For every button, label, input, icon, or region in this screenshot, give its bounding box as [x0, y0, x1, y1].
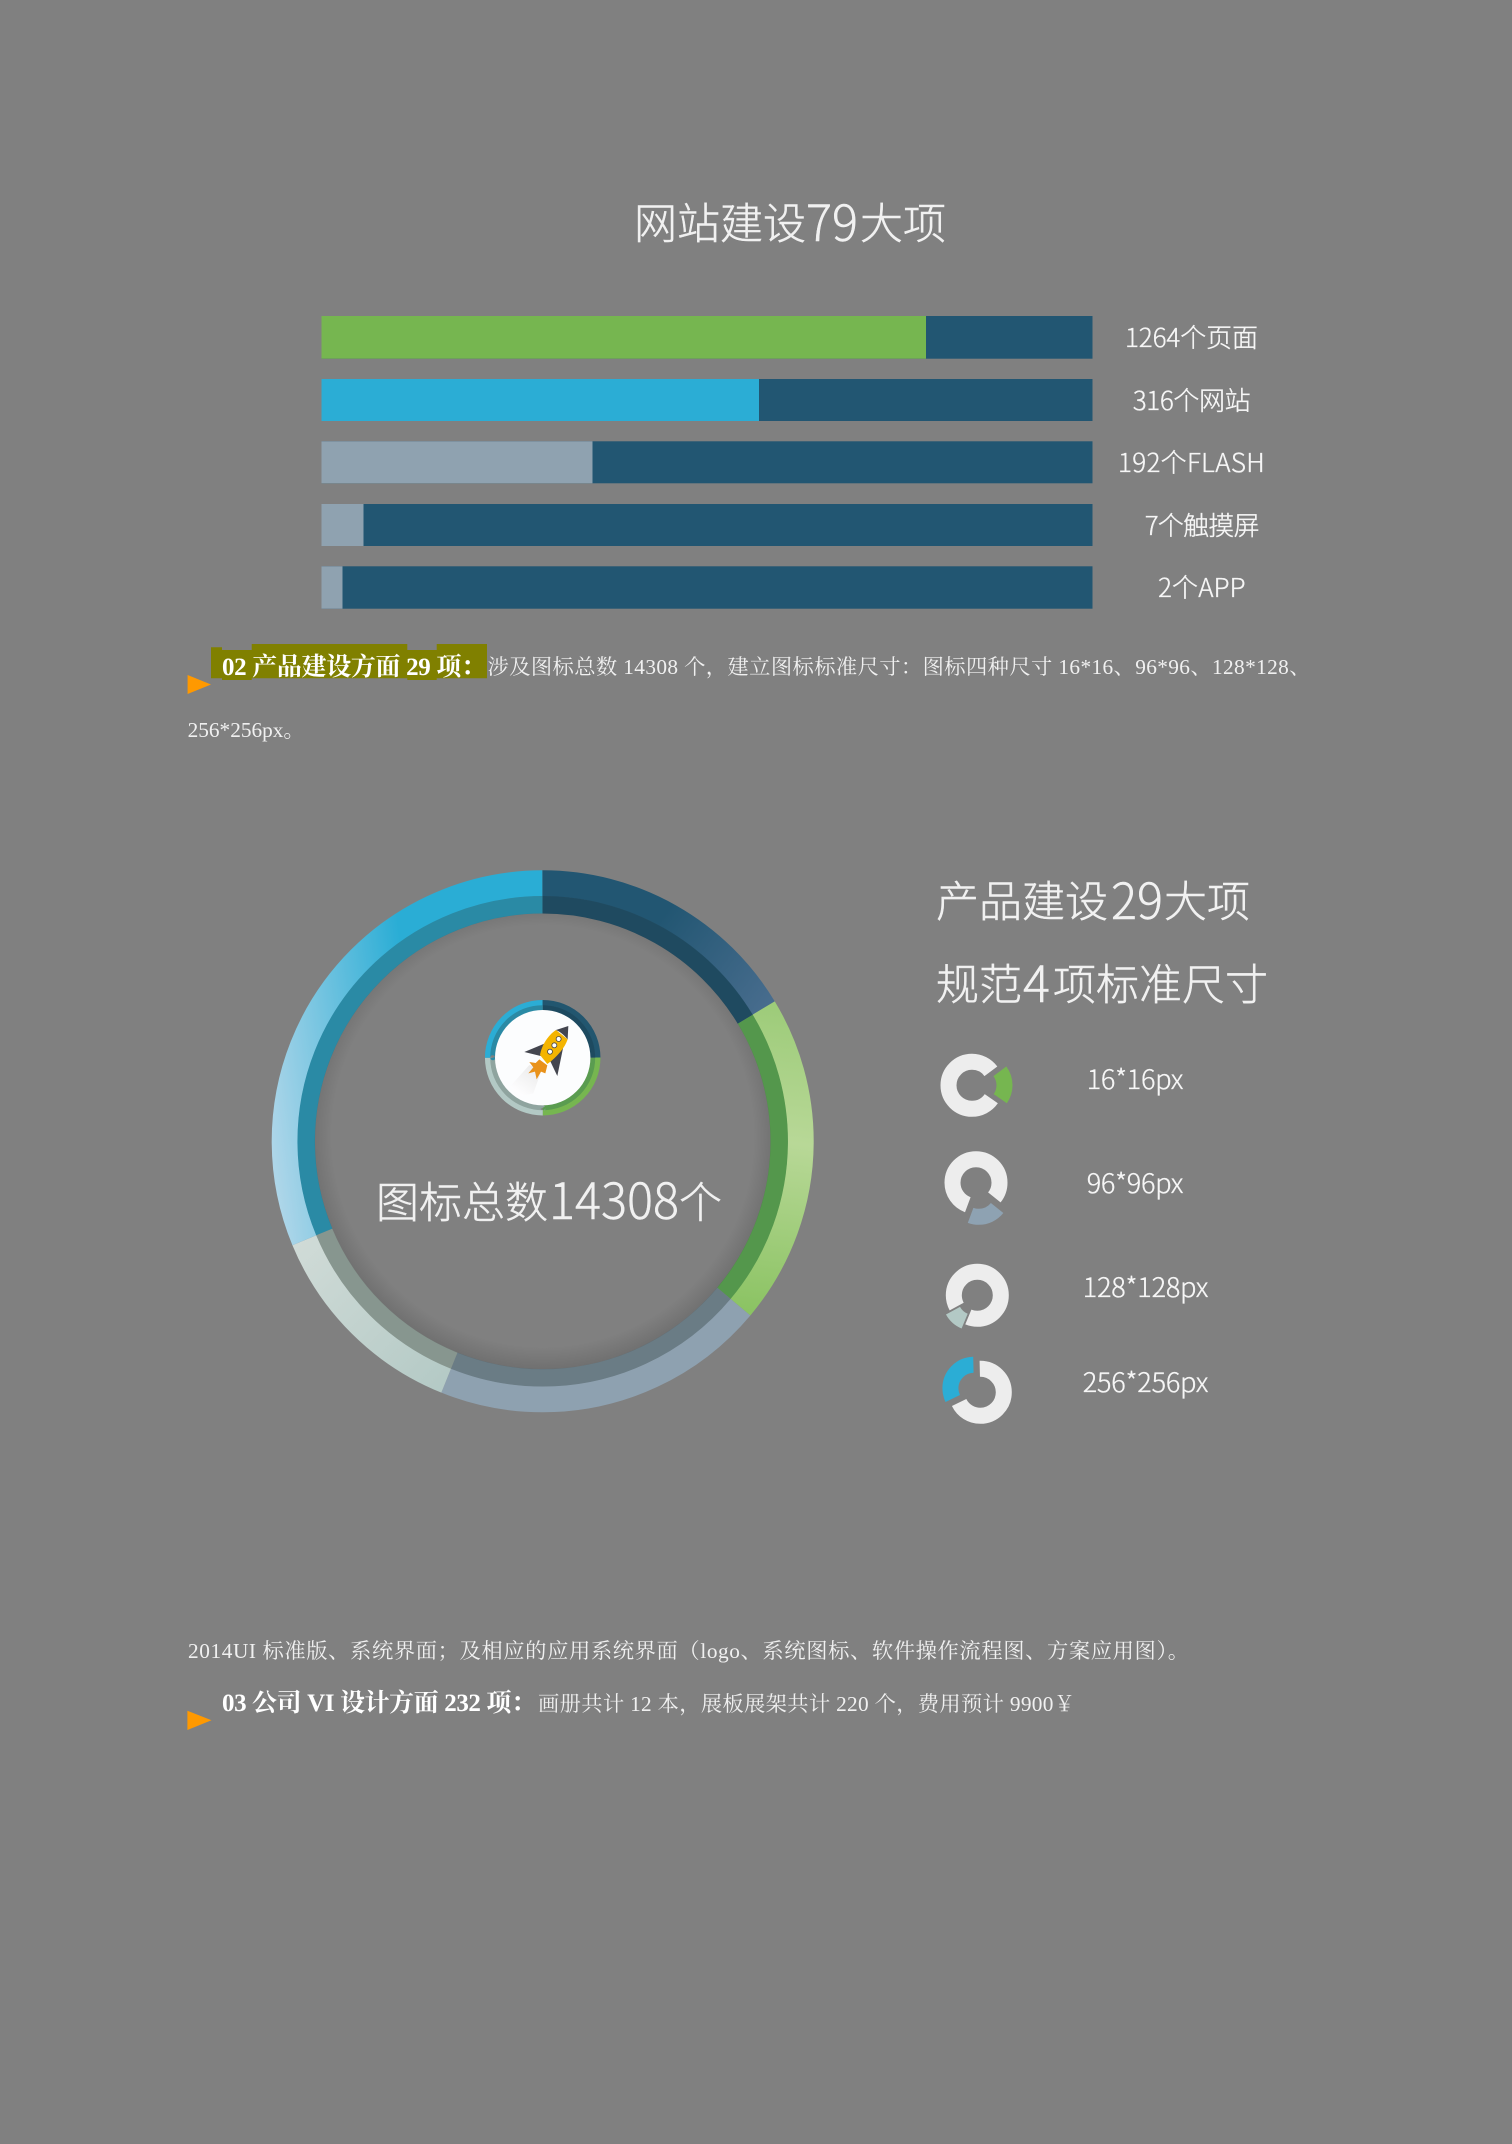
- inner dark ring segments: [306, 905, 779, 1378]
- icon: rocket badge: [488, 1003, 598, 1113]
- section 03 text block: [187, 1689, 1075, 1730]
- bar row: 2 apps: [322, 566, 1246, 609]
- heading: four standard sizes: 项标准尺寸: [1053, 951, 1268, 1013]
- bar row: 192 flash: 192个FLASH: [1118, 443, 1265, 480]
- bar row: 2 apps: 2个APP: [1158, 568, 1246, 605]
- donut center label: 图标总数: [376, 1169, 548, 1231]
- bar row: 7 touch screens: [322, 504, 1260, 546]
- heading: four standard sizes: 规范: [936, 951, 1022, 1013]
- icon: 16 size donut: [948, 1062, 1004, 1109]
- bar chart: website construction items: [322, 316, 1265, 609]
- arrow bullet: [188, 675, 211, 694]
- body line 2: 256*256px。: [188, 718, 305, 742]
- donut chart: total icons: [285, 883, 801, 1399]
- outer ring segments: [285, 883, 801, 1399]
- heading: company VI design: 03 公司 VI 设计方面 232 项：: [222, 1689, 536, 1717]
- heading: product construction 29 items: 大项: [1164, 868, 1250, 930]
- icon: 256 size donut: [950, 1365, 1004, 1416]
- text highlight: [211, 644, 487, 680]
- label: 16*16px: 16*16px: [1087, 1058, 1183, 1097]
- size legend: icon sizes: [948, 1058, 1208, 1416]
- icon: 96 size donut: [952, 1159, 1002, 1217]
- heading: product construction 29 items: 29: [1111, 862, 1163, 934]
- donut center label: 14308: [549, 1162, 679, 1234]
- body text: 画册共计 12 本，展板展架共计 220 个，费用预计 9900￥: [538, 1692, 1075, 1717]
- heading: product construction: 02 产品建设方面 29 项：: [222, 653, 486, 681]
- title: website construction: 网站建设: [634, 190, 806, 252]
- label: 96*96px: 96*96px: [1087, 1162, 1183, 1201]
- bar row: 1264 pages: [322, 316, 1258, 359]
- label: 128*128px: 128*128px: [1083, 1266, 1208, 1305]
- bar row: 192 flash: [322, 441, 1265, 483]
- inner shadow: [315, 913, 771, 1369]
- bar row: 316 websites: [322, 379, 1251, 421]
- bar row: 316 websites: 316个网站: [1133, 381, 1251, 418]
- donut center label: 个: [679, 1169, 722, 1231]
- icon: 128 size donut: [950, 1272, 1001, 1323]
- bar row: 1264 pages: 1264个页面: [1125, 318, 1258, 355]
- label: 256*256px: 256*256px: [1083, 1361, 1208, 1400]
- section 02 text block: [188, 644, 1311, 742]
- heading: product construction 29 items: 产品建设: [936, 868, 1108, 930]
- bar row: 7 touch screens: 7个触摸屏: [1145, 506, 1260, 543]
- arrow bullet: [187, 1711, 212, 1730]
- body line: 2014 UI standard edition: 2014UI 标准版、系统界面；及相应的应用系统界面（logo、系统图标、软件操作流程图、方案应用图）。: [188, 1639, 1189, 1663]
- title: website construction: 大项: [860, 190, 946, 252]
- body line 1: 涉及图标总数 14308 个，建立图标标准尺寸：图标四种尺寸 16*16、96*96、128*128、: [488, 655, 1310, 680]
- heading: four standard sizes: 4: [1023, 945, 1050, 1017]
- title: website construction: 79: [806, 184, 858, 256]
